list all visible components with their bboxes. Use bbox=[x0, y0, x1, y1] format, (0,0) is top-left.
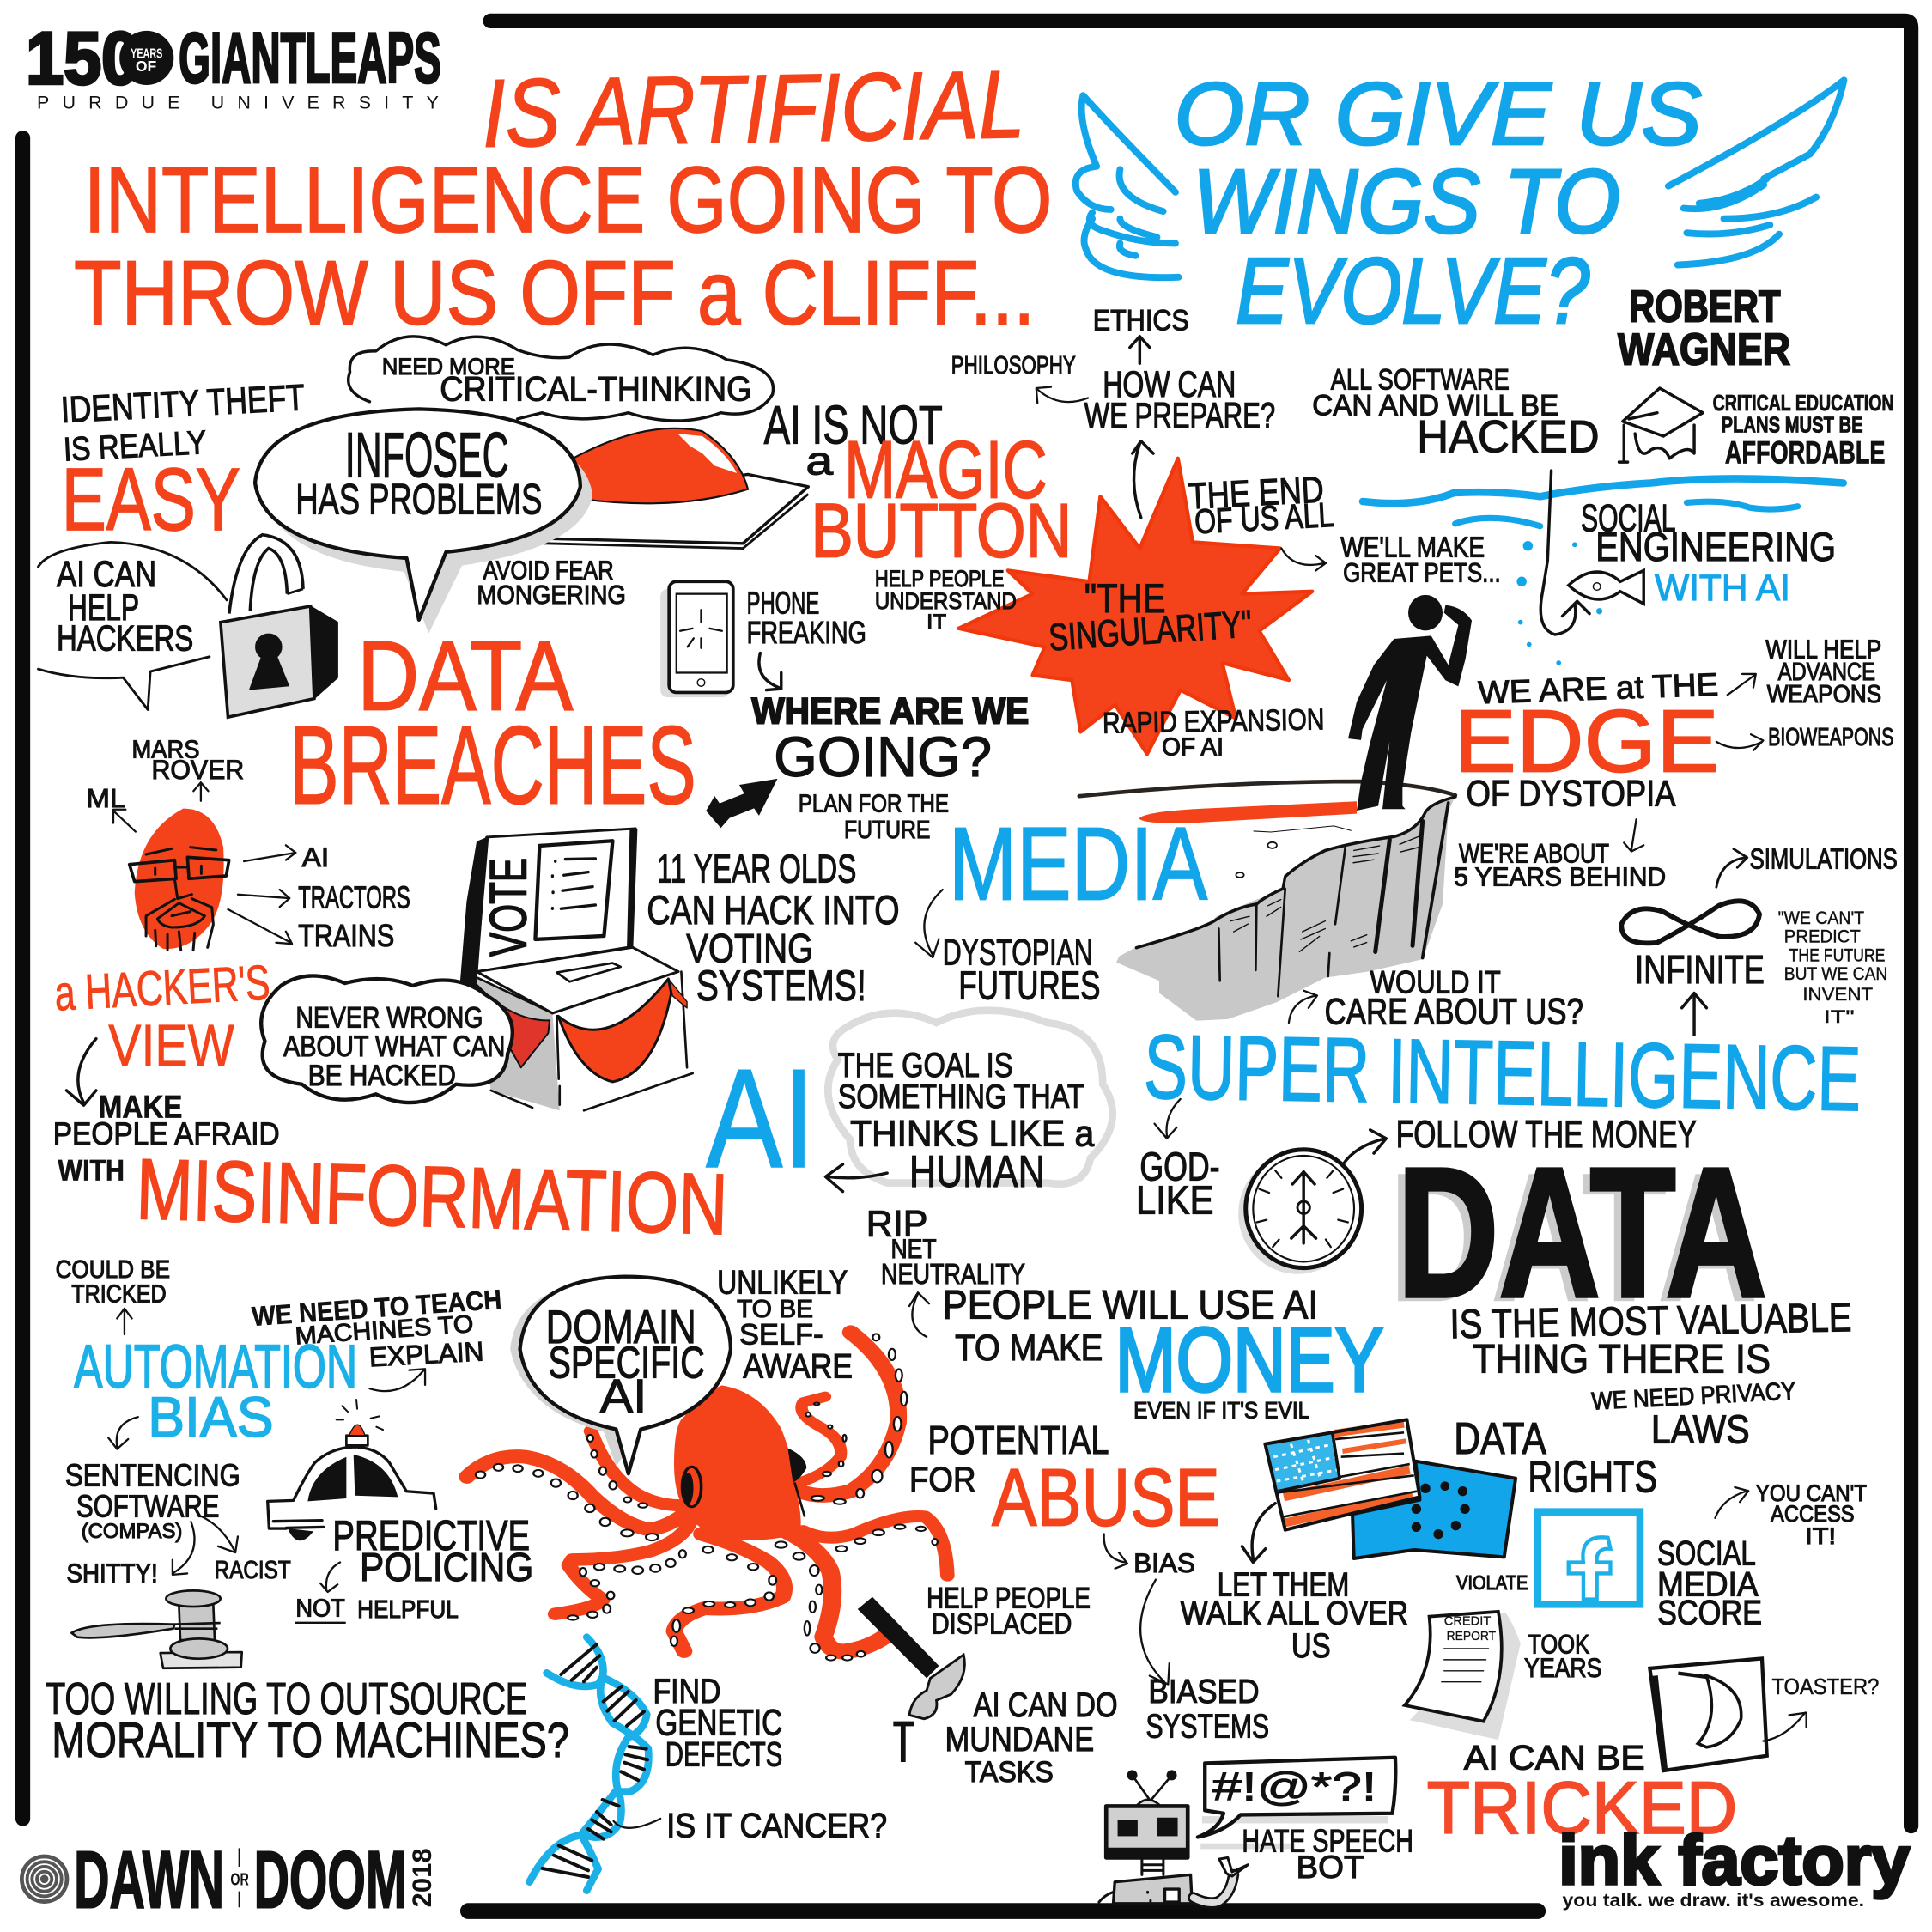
text: mars rover and ML: ML bbox=[86, 785, 125, 813]
icon: facebook box bbox=[1538, 1512, 1640, 1604]
text: we'll make great pets bbox=[1340, 532, 1501, 587]
arrows and text: AI, tractors, trains bbox=[228, 841, 410, 953]
text: would it care about us: WOULD IT bbox=[1370, 964, 1501, 1000]
speech bubble: domain specific AI bbox=[510, 1277, 731, 1473]
text: AI is not a magic button: BUTTON bbox=[811, 488, 1072, 574]
text: predictive policing not helpful bbox=[295, 1513, 533, 1624]
icon: singularity explosion bbox=[958, 459, 1312, 754]
icon: gavel bbox=[71, 1590, 242, 1668]
text: make people afraid with misinformation: MISINFORMATION bbox=[135, 1141, 729, 1253]
speech bubble: domain specific AI: SPECIFIC bbox=[549, 1337, 705, 1387]
text: avoid fear mongering: MONGERING bbox=[477, 581, 626, 610]
text: phone freaking: FREAKING bbox=[747, 616, 866, 650]
text: social media score: SCORE bbox=[1657, 1593, 1762, 1631]
text: 11 year olds can hack voting systems: 11 YEAR OLDS bbox=[657, 846, 856, 890]
text: is it cancer with connector: IS IT CANCER? bbox=[666, 1807, 887, 1845]
text: god-like: LIKE bbox=[1136, 1177, 1213, 1222]
text: identity theft is really easy: IS REALLY bbox=[63, 424, 207, 469]
text: critical education plans: PLANS MUST BE bbox=[1722, 414, 1863, 438]
text: all software will be hacked: CAN AND WILL BE bbox=[1312, 390, 1558, 422]
text: 11 year olds can hack voting systems: SYSTEMS! bbox=[696, 962, 866, 1010]
text: took years: YEARS bbox=[1524, 1652, 1601, 1683]
text: took years: TOOK bbox=[1528, 1629, 1589, 1660]
text: could be tricked: COULD BE bbox=[56, 1256, 170, 1284]
arrow: to net neutrality bbox=[909, 1292, 929, 1337]
text: potential for abuse: POTENTIAL bbox=[928, 1418, 1109, 1462]
text: help people displaced: DISPLACED bbox=[932, 1608, 1072, 1641]
text: help people understand it bbox=[875, 565, 1017, 634]
text: where are we going: WHERE ARE WE bbox=[751, 690, 1029, 732]
text: predict the future quote: "WE CAN'T bbox=[1778, 908, 1864, 928]
text and arrow: you can't access it bbox=[1715, 1479, 1867, 1549]
text: avoid fear mongering bbox=[477, 556, 626, 610]
text: sentencing software compas: SENTENCING bbox=[65, 1459, 240, 1493]
text: predictive policing not helpful: NOT bbox=[295, 1595, 345, 1623]
text: predictive policing not helpful: POLICING bbox=[360, 1545, 533, 1589]
text and arrow: you can't access it: YOU CAN'T bbox=[1756, 1479, 1867, 1506]
cloud: the goal is something that thinks like a human bbox=[828, 1011, 1113, 1196]
text: hate speech bot: HATE SPEECH bbox=[1242, 1823, 1413, 1859]
text: robert wagner bbox=[1618, 282, 1790, 374]
icon: infinity loop bbox=[1621, 901, 1759, 943]
arrow: view to make people afraid bbox=[66, 1039, 96, 1105]
text: too willing to outsource morality: MORALITY TO MACHINES? bbox=[52, 1713, 569, 1768]
text: unlikely to be self-aware bbox=[717, 1265, 853, 1385]
text: help people understand it: UNDERSTAND bbox=[875, 587, 1017, 614]
text: potential for abuse: ABUSE bbox=[992, 1452, 1220, 1543]
text: robert wagner: ROBERT bbox=[1629, 282, 1781, 331]
text: bioweapons: BIOWEAPONS bbox=[1768, 724, 1894, 751]
text: data rights, privacy laws bbox=[1454, 1377, 1796, 1502]
text: identity theft is really easy bbox=[60, 377, 306, 549]
icon: compass bbox=[1238, 1150, 1362, 1274]
text: we need to teach machines to explain: WE NEED TO TEACH bbox=[251, 1284, 502, 1332]
arrow: up to could be tricked bbox=[117, 1309, 132, 1334]
text: how can we prepare: WE PREPARE? bbox=[1084, 395, 1275, 435]
icon: credit report bbox=[1405, 1612, 1521, 1740]
text: the end of us all: THE END bbox=[1188, 469, 1325, 518]
text: could be tricked bbox=[56, 1256, 170, 1309]
text: robert wagner: WAGNER bbox=[1618, 325, 1790, 374]
text: AI is not a magic button: AI IS NOT bbox=[764, 396, 943, 456]
text: social media score: SOCIAL bbox=[1657, 1534, 1756, 1572]
speech bubble: domain specific AI: DOMAIN bbox=[546, 1301, 696, 1353]
icon: credit report: REPORT bbox=[1447, 1630, 1496, 1643]
text: social media score bbox=[1657, 1534, 1762, 1631]
logo: dawn or doom 2018: DOOM bbox=[254, 1834, 407, 1925]
text: predict the future quote: INVENT bbox=[1802, 984, 1873, 1005]
arrow: bias to sentencing bbox=[108, 1417, 138, 1449]
text: mars rover and ML: MARS bbox=[132, 736, 199, 763]
logo: dawn or doom 2018: DAWN bbox=[74, 1834, 224, 1925]
icon: hacker face bbox=[130, 809, 229, 951]
text: 11 year olds can hack voting systems bbox=[647, 846, 900, 1010]
text: how can we prepare bbox=[1084, 364, 1275, 435]
text: hate speech bot: BOT bbox=[1297, 1849, 1364, 1885]
heading: automation bias bbox=[74, 1333, 357, 1449]
text: sentencing software compas: SHITTY! bbox=[66, 1559, 158, 1588]
arrow: superintelligence to god-like bbox=[1155, 1099, 1181, 1139]
text: we are at the edge of dystopia: OF DYSTOPIA bbox=[1467, 773, 1676, 814]
icon: ballot box: VOTE bbox=[480, 858, 538, 957]
heading: a hacker's view bbox=[53, 956, 271, 1078]
text: RIP net neutrality: RIP bbox=[866, 1203, 928, 1244]
text: predict the future quote: IT" bbox=[1824, 1006, 1855, 1027]
title: blue question bbox=[1175, 64, 1702, 343]
text: AI is not a magic button: a bbox=[805, 438, 834, 483]
text: would it care about us: CARE ABOUT US? bbox=[1325, 991, 1583, 1032]
logo: dawn or doom 2018 bbox=[20, 1834, 437, 1925]
text: help people displaced: HELP PEOPLE bbox=[927, 1583, 1091, 1615]
logo: 150 years of giant leaps: OF bbox=[136, 58, 156, 75]
logo: dawn or doom 2018: 2018 bbox=[406, 1848, 437, 1907]
text: sentencing software compas: (COMPAS) bbox=[82, 1520, 182, 1543]
icon: graduation cap bbox=[1619, 388, 1703, 462]
cloud: the goal is something that thinks like a human: THINKS LIKE a bbox=[850, 1114, 1094, 1155]
heading: AI: AI bbox=[706, 1040, 815, 1197]
arrow: down to where are we going bbox=[759, 653, 781, 690]
text: unlikely to be self-aware: TO BE bbox=[737, 1296, 813, 1323]
text: where are we going: FUTURE bbox=[844, 817, 930, 844]
cloud: the goal is something that thinks like a human: THE GOAL IS bbox=[838, 1046, 1013, 1084]
text: people will use AI to make money: EVEN IF IT'S EVIL bbox=[1133, 1397, 1309, 1424]
logo: ink factory: you talk. we draw. it's awesome. bbox=[1563, 1890, 1864, 1911]
arrows and text: AI, tractors, trains: TRACTORS bbox=[298, 881, 410, 915]
heading: automation bias: BIAS bbox=[148, 1385, 274, 1449]
text: predict the future quote: THE FUTURE bbox=[1789, 945, 1885, 965]
arrow: curved up bbox=[1289, 991, 1317, 1023]
text: will help advance weapons: WILL HELP bbox=[1765, 635, 1881, 664]
text: potential for abuse bbox=[909, 1418, 1220, 1543]
title: red question: THROW US OFF a CLIFF... bbox=[74, 241, 1035, 343]
icon: padlock bbox=[221, 535, 337, 717]
text: social engineering with AI: SOCIAL bbox=[1581, 497, 1676, 539]
text: we'll make great pets: WE'LL MAKE bbox=[1340, 532, 1485, 563]
arrow: to simulations bbox=[1716, 849, 1747, 887]
speech box: censored swearing: #!@*?! bbox=[1212, 1765, 1376, 1809]
arrow: media to dystopian futures bbox=[915, 890, 943, 957]
text: dystopian futures bbox=[943, 933, 1100, 1008]
text and arrows: bias to biased systems: BIASED bbox=[1148, 1674, 1260, 1710]
speech bubble: domain specific AI: AI bbox=[600, 1370, 647, 1422]
text: unlikely to be self-aware: SELF- bbox=[739, 1319, 823, 1352]
icon: hammer and nail bbox=[858, 1597, 964, 1762]
text and arrow: let them walk all over us: WALK ALL OVER bbox=[1181, 1595, 1408, 1631]
text: critical education plans bbox=[1713, 392, 1894, 471]
icon: left wing bbox=[1076, 95, 1179, 277]
logo: 150 years of giant leaps: GIANTLEAPS bbox=[179, 18, 441, 98]
text: we need to teach machines to explain bbox=[251, 1284, 502, 1372]
title: blue question: OR GIVE US bbox=[1175, 64, 1702, 163]
text: predictive policing not helpful: HELPFUL bbox=[357, 1596, 459, 1624]
text: all software will be hacked: ALL SOFTWARE bbox=[1331, 363, 1510, 396]
text: make people afraid with misinformation: WITH bbox=[58, 1155, 125, 1188]
text and arrow: let them walk all over us: US bbox=[1291, 1626, 1331, 1665]
text: philosophy: PHILOSOPHY bbox=[951, 352, 1076, 380]
text: RIP net neutrality bbox=[866, 1203, 1025, 1290]
icon: right wing bbox=[1668, 80, 1844, 265]
heading: data (large black): DATA bbox=[1388, 1133, 1759, 1340]
text: AI can do mundane tasks: MUNDANE bbox=[945, 1720, 1094, 1759]
icon: cliff bbox=[1079, 781, 1455, 1021]
cloud: never wrong about what can be hacked: BE HACKED bbox=[308, 1060, 456, 1092]
text: AI is not a magic button: MAGIC bbox=[844, 425, 1048, 516]
arrow: to explain bbox=[369, 1369, 425, 1391]
text: hate speech bot bbox=[1242, 1823, 1413, 1885]
text: help people understand it: HELP PEOPLE bbox=[875, 565, 1004, 592]
icon: toaster sticker banana bbox=[1649, 1658, 1767, 1771]
text: is the most valuable thing there is: IS THE MOST VALUABLE bbox=[1449, 1295, 1852, 1347]
text: where are we going bbox=[751, 690, 1029, 844]
arrow: up to infinite bbox=[1682, 993, 1706, 1035]
text: mars rover and ML bbox=[86, 736, 244, 832]
title: red question: IS ARTIFICIAL bbox=[482, 51, 1025, 167]
text: predictive policing not helpful: PREDICTIVE bbox=[332, 1513, 530, 1559]
speech box: censored swearing bbox=[1198, 1758, 1395, 1849]
text: where are we going: PLAN FOR THE bbox=[799, 791, 949, 818]
logo: 150 years of giant leaps: 150 bbox=[26, 18, 139, 100]
text: dystopian futures: FUTURES bbox=[958, 963, 1100, 1008]
icon: smartphone bbox=[660, 581, 733, 697]
text: AI can do mundane tasks: AI CAN DO bbox=[974, 1686, 1117, 1724]
text: find genetic defects: GENETIC bbox=[655, 1702, 782, 1743]
text: we are at the edge of dystopia: WE ARE at THE bbox=[1478, 666, 1719, 710]
cloud: never wrong about what can be hacked bbox=[261, 975, 513, 1103]
icon: police car with siren bbox=[268, 1400, 436, 1540]
text: we're about 5 years behind: WE'RE ABOUT bbox=[1459, 837, 1609, 868]
heading: data breaches bbox=[289, 622, 696, 828]
icon: hate speech robot bbox=[1099, 1770, 1248, 1904]
text: sentencing software compas: RACIST bbox=[215, 1557, 291, 1584]
title: blue question: EVOLVE? bbox=[1236, 239, 1589, 343]
cloud: the goal is something that thinks like a human: SOMETHING THAT bbox=[838, 1078, 1084, 1115]
icon: man at the cliff edge bbox=[1348, 595, 1472, 811]
icon: singularity explosion: "THE bbox=[1084, 576, 1165, 622]
arrow: to philosophy bbox=[1036, 387, 1088, 403]
arrow: to bioweapons bbox=[1716, 734, 1763, 750]
text: people will use AI to make money: PEOPLE WILL USE AI bbox=[943, 1282, 1318, 1327]
text: unlikely to be self-aware: AWARE bbox=[743, 1346, 853, 1385]
text: we'll make great pets: GREAT PETS... bbox=[1343, 556, 1501, 587]
text: is the most valuable thing there is: THING THERE IS bbox=[1473, 1337, 1771, 1382]
text: data rights, privacy laws: LAWS bbox=[1651, 1406, 1750, 1451]
text: will help advance weapons bbox=[1765, 635, 1881, 708]
arrow: to weapons bbox=[1728, 674, 1756, 695]
icon: US flag bbox=[1265, 1419, 1419, 1530]
heading: a hacker's view: a HACKER'S bbox=[53, 956, 271, 1022]
text: will help advance weapons: ADVANCE bbox=[1778, 659, 1875, 686]
icon: thick black double arrow bbox=[706, 779, 777, 828]
text: unlikely to be self-aware: UNLIKELY bbox=[717, 1265, 848, 1302]
text: RIP net neutrality: NET bbox=[890, 1233, 937, 1264]
text: rapid expansion of AI: RAPID EXPANSION bbox=[1103, 703, 1325, 740]
speech bubble: AI can help hackers bbox=[38, 542, 227, 710]
text: make people afraid with misinformation: MAKE bbox=[99, 1088, 182, 1124]
heading: media: MEDIA bbox=[949, 806, 1208, 922]
title: red question bbox=[74, 51, 1052, 343]
icon: EU flag bbox=[1352, 1461, 1516, 1558]
text: follow the money: FOLLOW THE MONEY bbox=[1396, 1114, 1697, 1156]
text: find genetic defects: DEFECTS bbox=[665, 1735, 782, 1773]
text: RIP net neutrality: NEUTRALITY bbox=[881, 1258, 1025, 1290]
arrow: singularity to prepare bbox=[1133, 441, 1153, 518]
text: we are at the edge of dystopia bbox=[1454, 666, 1719, 814]
text: phone freaking bbox=[747, 586, 866, 650]
text: people will use AI to make money: MONEY bbox=[1115, 1309, 1383, 1411]
text: we are at the edge of dystopia: EDGE bbox=[1454, 690, 1719, 790]
text: sentencing software compas: SOFTWARE bbox=[76, 1489, 219, 1523]
text: 11 year olds can hack voting systems: VOTING bbox=[686, 927, 813, 972]
text: AI can be tricked: AI CAN BE bbox=[1464, 1739, 1645, 1777]
speech bubble: infosec has problems bbox=[255, 409, 592, 634]
text: will help advance weapons: WEAPONS bbox=[1767, 681, 1881, 708]
text and arrows: bias to biased systems: SYSTEMS bbox=[1146, 1708, 1269, 1745]
icon: ballot box bbox=[459, 829, 693, 1110]
cloud: need more critical thinking: NEED MORE bbox=[382, 353, 515, 380]
text and arrow: toaster: TOASTER? bbox=[1771, 1675, 1879, 1699]
title: red question: INTELLIGENCE GOING TO bbox=[84, 148, 1052, 252]
logo: dawn or doom 2018: OR bbox=[230, 1870, 249, 1889]
text: potential for abuse: FOR bbox=[909, 1460, 975, 1498]
text: is the most valuable thing there is bbox=[1449, 1295, 1852, 1382]
icon: orange octopus bbox=[467, 1333, 947, 1661]
text: predict the future quote: BUT WE CAN bbox=[1784, 963, 1887, 984]
arrow: down from dystopia bbox=[1624, 819, 1643, 852]
text: we're about 5 years behind bbox=[1454, 837, 1666, 892]
text: avoid fear mongering: AVOID FEAR bbox=[483, 556, 614, 585]
text: identity theft is really easy: EASY bbox=[62, 449, 240, 549]
logo: ink factory: ink factory bbox=[1558, 1822, 1910, 1899]
text and arrow: toaster bbox=[1763, 1675, 1879, 1741]
text: rapid expansion of AI: OF AI bbox=[1162, 734, 1224, 762]
text: help people displaced bbox=[927, 1583, 1091, 1641]
text: AI is not a magic button bbox=[764, 396, 1072, 574]
text: AI can do mundane tasks: TASKS bbox=[965, 1756, 1054, 1789]
heading: data breaches: DATA bbox=[357, 622, 574, 732]
cloud: the goal is something that thinks like a human: HUMAN bbox=[909, 1146, 1045, 1196]
speech bubble: infosec has problems: HAS PROBLEMS bbox=[295, 475, 542, 523]
cloud: need more critical thinking bbox=[349, 337, 773, 421]
text: phone freaking: PHONE bbox=[747, 586, 819, 621]
cloud: never wrong about what can be hacked: NEVER WRONG bbox=[295, 1002, 483, 1035]
heading: data (large black): DATA bbox=[1397, 1129, 1767, 1336]
text: identity theft is really easy: IDENTITY THEFT bbox=[60, 377, 306, 431]
text and arrow: let them walk all over us: LET THEM bbox=[1218, 1566, 1349, 1603]
text: social engineering with AI bbox=[1581, 497, 1836, 609]
icon: credit report: CREDIT bbox=[1444, 1615, 1492, 1629]
cloud: need more critical thinking: CRITICAL-THINKING bbox=[440, 369, 751, 408]
text: predict the future quote bbox=[1778, 908, 1887, 1027]
text: data rights, privacy laws: DATA bbox=[1454, 1413, 1546, 1463]
text: predict the future quote: PREDICT bbox=[1784, 927, 1861, 947]
text: AI can do mundane tasks bbox=[945, 1686, 1117, 1789]
text: could be tricked: TRICKED bbox=[71, 1281, 167, 1309]
heading: data breaches: BREACHES bbox=[289, 704, 696, 828]
text: mars rover and ML: ROVER bbox=[151, 754, 244, 785]
arrow: to great pets bbox=[1281, 549, 1326, 570]
text: social media score: MEDIA bbox=[1657, 1564, 1759, 1603]
text: the end of us all bbox=[1188, 469, 1334, 541]
text and arrow: let them walk all over us bbox=[1181, 1504, 1408, 1665]
text: violate: VIOLATE bbox=[1456, 1571, 1528, 1594]
icon: DNA helix bbox=[530, 1637, 648, 1891]
text: rapid expansion of AI bbox=[1103, 703, 1325, 762]
text: all software will be hacked bbox=[1312, 363, 1600, 463]
icon: fishing hook, bubbles and fish bbox=[1516, 471, 1643, 665]
icon: singularity explosion: SINGULARITY" bbox=[1048, 603, 1253, 659]
arrows and text: AI, tractors, trains: AI bbox=[302, 841, 329, 872]
arrow: human to AI bbox=[825, 1164, 887, 1192]
text: took years bbox=[1524, 1629, 1601, 1683]
text and arrows: bias to biased systems: BIAS bbox=[1133, 1547, 1195, 1578]
text: too willing to outsource morality: TOO WILLING TO OUTSOURCE bbox=[46, 1674, 527, 1723]
speech bubble: AI can help hackers: HELP bbox=[68, 587, 139, 629]
speech bubble: infosec has problems: INFOSEC bbox=[345, 418, 509, 490]
text: we're about 5 years behind: 5 YEARS BEHIND bbox=[1454, 864, 1666, 892]
text: where are we going: GOING? bbox=[774, 725, 992, 788]
logo: 150 years of giant leaps: PURDUE UNIVERSITY bbox=[37, 92, 439, 112]
text: make people afraid with misinformation: PEOPLE AFRAID bbox=[53, 1115, 280, 1151]
text: find genetic defects bbox=[653, 1672, 782, 1773]
text: ethics: ETHICS bbox=[1093, 305, 1189, 337]
text: help people understand it: IT bbox=[927, 611, 946, 634]
text and arrow: you can't access it: ACCESS bbox=[1771, 1500, 1855, 1527]
cloud: never wrong about what can be hacked: ABOUT WHAT CAN bbox=[283, 1030, 505, 1063]
icon: red magic button bbox=[542, 428, 808, 549]
text: AI can be tricked: TRICKED bbox=[1427, 1767, 1737, 1850]
logo: 150 years of giant leaps bbox=[26, 18, 441, 112]
text: god-like bbox=[1136, 1145, 1220, 1222]
arrow: compass to follow the money bbox=[1343, 1130, 1386, 1164]
text: we need to teach machines to explain: MACHINES TO bbox=[295, 1310, 474, 1351]
heading: automation bias: AUTOMATION bbox=[74, 1333, 357, 1401]
text: how can we prepare: HOW CAN bbox=[1103, 364, 1236, 405]
text and arrows: bias to biased systems bbox=[1104, 1534, 1269, 1745]
text: find genetic defects: FIND bbox=[653, 1672, 720, 1710]
logo: 150 years of giant leaps: YEARS bbox=[131, 46, 162, 61]
text: data rights, privacy laws: WE NEED PRIVACY bbox=[1591, 1377, 1796, 1416]
text: we need to teach machines to explain: EXPLAIN bbox=[368, 1335, 484, 1372]
text: people will use AI to make money: TO MAKE bbox=[955, 1327, 1103, 1369]
text: too willing to outsource morality bbox=[46, 1674, 569, 1768]
text: all software will be hacked: HACKED bbox=[1417, 412, 1600, 463]
text: would it care about us bbox=[1325, 964, 1583, 1032]
speech bubble: AI can help hackers: HACKERS bbox=[57, 618, 193, 659]
speech bubble: AI can help hackers: AI CAN bbox=[57, 554, 156, 595]
arrows and text: AI, tractors, trains: TRAINS bbox=[298, 919, 394, 953]
text: social engineering with AI: ENGINEERING bbox=[1595, 525, 1836, 570]
heading: a hacker's view: VIEW bbox=[108, 1012, 234, 1078]
text: infinite: INFINITE bbox=[1635, 947, 1765, 992]
text: sentencing software compas bbox=[65, 1459, 291, 1588]
text: people will use AI to make money bbox=[943, 1282, 1383, 1424]
text: dystopian futures: DYSTOPIAN bbox=[943, 933, 1093, 974]
icon: blue water waves bbox=[1363, 478, 1844, 526]
text: the end of us all: OF US ALL bbox=[1194, 495, 1334, 541]
text: make people afraid with misinformation bbox=[53, 1088, 729, 1253]
text: data rights, privacy laws: RIGHTS bbox=[1528, 1452, 1657, 1502]
text: god-like: GOD- bbox=[1139, 1145, 1220, 1189]
text: 11 year olds can hack voting systems: CAN HACK INTO bbox=[647, 888, 900, 933]
arrow: up to ethics bbox=[1130, 337, 1150, 363]
title: blue question: WINGS TO bbox=[1193, 150, 1620, 252]
text: social engineering with AI: WITH AI bbox=[1655, 568, 1790, 609]
text and arrow: you can't access it: IT! bbox=[1805, 1522, 1836, 1549]
